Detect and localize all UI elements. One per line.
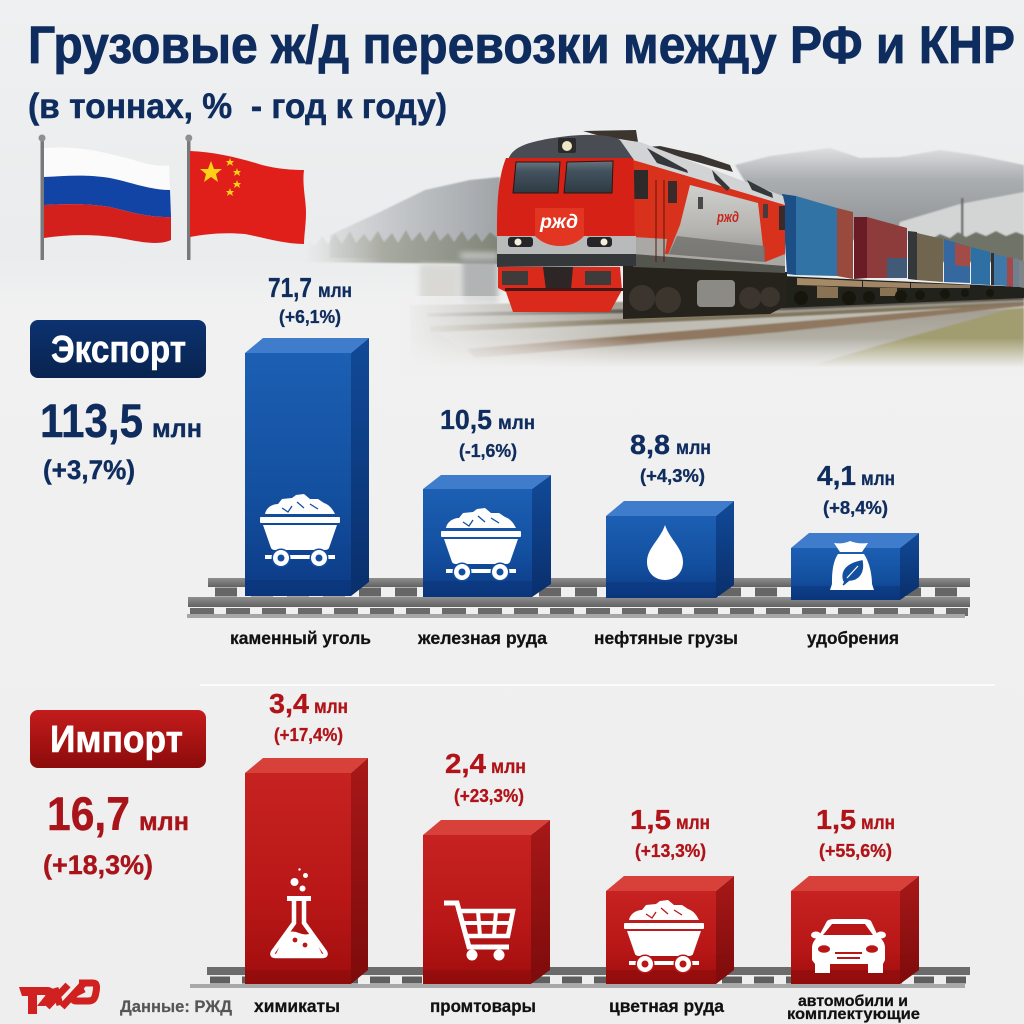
brown container [908,231,917,280]
value: oil: млн [676,438,711,459]
logo on plate: ржд [539,212,578,233]
roof equipment [583,130,638,142]
import bar values [269,688,895,861]
icon: car [811,919,886,973]
value: coal: 71,7 [268,272,312,303]
side body red [633,158,785,272]
export total: 113,5 [40,394,143,447]
export total [40,394,202,485]
import total: млн [139,806,189,836]
windows [513,162,560,193]
logo plate [535,208,584,246]
import category labels: цветная руда [609,996,724,1016]
export category labels [230,628,899,648]
icon: ore cart [624,900,704,974]
icon: fertilizer bag [830,541,874,590]
under-frame and bogies [623,265,787,319]
locomotive [497,130,787,319]
value: non-ferrous ore [630,804,710,861]
value: chemicals [269,688,348,745]
roof [508,135,634,160]
headlights [508,237,533,247]
grass [790,305,1024,372]
value: coal [268,272,352,327]
rail track: export [187,578,970,618]
front red [497,158,635,238]
import total [43,787,189,880]
import category labels: промтовары [430,996,536,1016]
value: non-ferrous ore: (+13,3%) [635,841,706,861]
side roof [620,140,785,205]
mountain foreground [895,192,1024,240]
roof grilles [647,148,688,173]
forest left [305,230,500,264]
bar: fertilizer [791,533,919,600]
value: consumer goods: (+23,3%) [454,786,524,806]
import total: 16,7 [47,787,130,840]
headlight top [558,138,576,153]
far track dark line [427,297,1024,317]
value: cars [816,804,895,861]
gravel [440,305,1024,348]
photo: distant station [420,253,498,306]
value: iron ore: (-1,6%) [459,441,517,461]
value: consumer goods: млн [491,757,526,778]
icon: coal cart [260,494,340,568]
value: non-ferrous ore: млн [676,813,710,834]
badge: export [30,320,206,378]
value: oil: 8,8 [630,429,670,460]
bar: cars [791,876,919,984]
value: consumer goods [445,748,526,806]
side panel stripes [668,236,765,262]
value: fertilizer: 4,1 [817,460,856,491]
track one [430,302,1024,332]
side silver panel [667,185,765,263]
side windows [634,170,648,199]
import category labels: комплектующие [787,1006,920,1023]
blue container [782,194,796,275]
export bar values [268,272,895,518]
wheels [629,285,780,313]
value: oil: (+4,3%) [640,466,705,486]
value: chemicals: (+17,4%) [274,725,343,745]
export total: млн [152,413,202,443]
value: fertilizer: (+8,4%) [823,498,888,518]
side rails [656,180,664,262]
ground [410,296,1024,372]
badge: import: Импорт [50,719,183,761]
photo: mountains, forest and railway track [305,148,1024,264]
dark band [497,254,636,267]
value: non-ferrous ore: 1,5 [630,804,671,835]
badge: export: Экспорт [51,329,186,371]
grey band [497,236,636,254]
rail track: import [190,967,970,988]
value: fertilizer: млн [861,469,895,490]
value: chemicals: млн [314,697,348,718]
value: cars: 1,5 [816,804,856,835]
photo: ground and tracks [410,296,1024,372]
bumper [498,267,622,312]
flag: China [185,134,306,260]
import category labels: химикаты [254,996,340,1016]
icon: flask [272,868,326,956]
icon: RZD logo [19,982,97,1014]
wagon decks [782,276,1024,308]
export category labels: каменный уголь [230,628,371,648]
red container [854,217,867,279]
icon: shopping cart [444,903,513,960]
subtitle: (в тоннах, % - год к году) [28,87,447,126]
value: fertilizer [817,460,895,518]
icon: oil drop [647,525,683,580]
value: iron ore [440,404,535,461]
value: iron ore: млн [498,413,535,434]
value: chemicals: 3,4 [269,688,309,719]
value: oil [630,429,711,486]
value: iron ore: 10,5 [440,404,492,435]
side logo: ржд [716,209,739,226]
train containers [782,194,1024,308]
bar: consumer goods [423,820,550,984]
import category labels [254,993,920,1023]
mountain left [330,177,500,258]
fuel tank [697,280,735,307]
icon: ore cart [441,508,521,582]
value: cars: (+55,6%) [819,841,892,861]
badge: import [30,710,206,768]
source note: Данные: РЖД [120,997,232,1016]
blue and red container [944,239,970,283]
wagon wheels [794,289,994,305]
value: coal: млн [318,281,352,302]
bar: iron ore [423,475,551,597]
bar: coal [245,338,369,596]
value: cars: млн [861,813,895,834]
mountain right [735,148,1024,240]
bar: chemicals [245,758,368,984]
forest right [930,231,1024,262]
pylon [961,198,964,236]
side lower band [633,237,785,270]
value: consumer goods: 2,4 [445,748,486,779]
bar: non-ferrous ore [606,876,734,984]
photo fade [400,296,1024,376]
export category labels: железная руда [417,628,547,648]
blue container 2 [971,247,990,285]
track two [467,303,1024,358]
import total: (+18,3%) [43,850,153,880]
export total: (+3,7%) [43,455,135,485]
export category labels: удобрения [807,628,899,648]
export category labels: нефтяные грузы [594,628,738,648]
bar: oil [606,501,734,598]
far containers [994,254,1007,286]
import category labels: автомобили и [798,993,908,1010]
divider [200,684,995,686]
value: coal: (+6,1%) [279,307,341,327]
flag: Russia [38,134,171,260]
